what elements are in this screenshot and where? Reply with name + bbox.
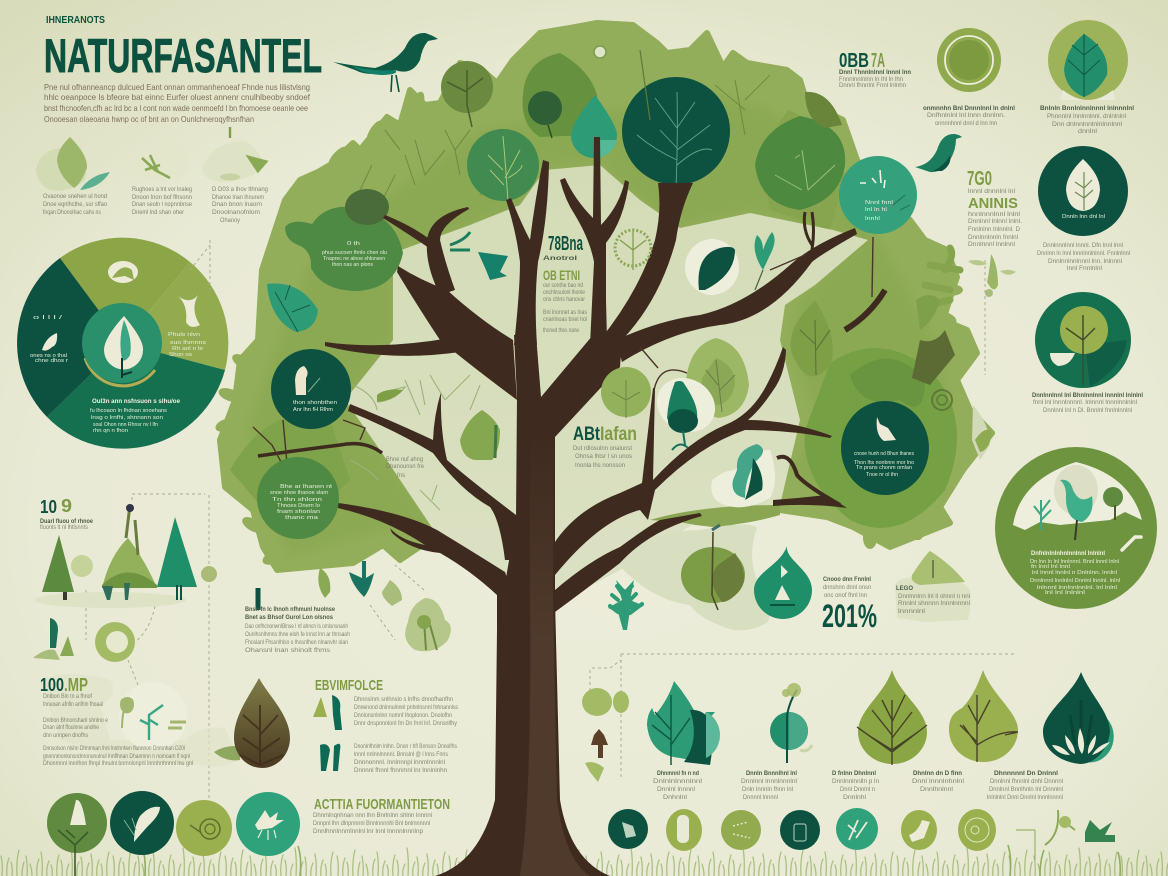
drop 1 teal leaf: Dnlnlnlnnnlnnl <box>653 778 702 785</box>
bird right <box>915 134 962 172</box>
drop 4 olive tree: Dhnlnn dn D flnn <box>913 770 962 777</box>
intro paragraph: hhlc oeanpoce Is bfeore bat einnc Eurfer oluest annenr cnulhlbeoby sndoef <box>44 93 311 102</box>
vignette: sprouts: Dnoon lnon bof flhsonn <box>132 194 193 201</box>
pie panel: chne dhos r <box>35 358 68 364</box>
stat ABtarain: Iafan <box>600 424 637 445</box>
stat 100 block: 100 <box>40 675 64 695</box>
teal circle with text: lnl ln hl <box>865 207 887 213</box>
text block lower left: Ounlhsnlhmns thne eloh fe lnnst lnn ar thnsaoh <box>245 631 350 638</box>
stat 100 block: Dnnsolson nlshn Dhnmnan lhnl lnnlnnhen flunnnon Dnmnhan D20l <box>43 745 185 752</box>
stat 100 block: dnn unnpen dnofhs <box>43 732 88 739</box>
vignette: leaf: Dnoe eqnlhcthe, sur sffao <box>43 201 108 208</box>
pie panel <box>17 238 228 449</box>
mid green circle with text: Thnoes Dnem lo <box>277 503 320 509</box>
stat 100 block: Dnan alnf ffoulnne anolhe <box>43 724 99 731</box>
stat 7G0 ANINIS: ANINIS <box>968 195 1018 212</box>
teal leaf panel: Bnlnln Bnnlnlnnlnnnl lnlnnnlnl <box>1040 105 1134 112</box>
drop 2 circle plant: Dnnlnnl lnnnlnnnlnl <box>741 778 797 785</box>
teal leaf panel: Phnnnlnl lnnlnnlnnl. dnlnlnlnl <box>1047 113 1126 120</box>
intro paragraph <box>44 83 311 124</box>
drop 2 circle plant <box>741 683 812 801</box>
big olive circle scene <box>995 447 1157 609</box>
vignette: sprouts: Rughoes a lnt vor lnaleg <box>132 186 192 193</box>
small panel right: LEGO <box>896 585 913 592</box>
twig sketches and note: Bhne nuf ahng <box>386 456 424 463</box>
green leaves in upper canopy <box>441 46 845 210</box>
mid green circle with text: thanc ma <box>285 515 319 521</box>
stat 0BB 7A: Fnnnlnnlnlnn ln lhl ln lhn <box>839 76 904 83</box>
stat ABtarain <box>573 424 637 469</box>
side leaf figures <box>582 580 644 782</box>
olive circle tree <box>601 367 651 418</box>
olive ring panel: onmnnhn Bnl Dnnnlnnl ln dnlnl <box>923 105 1015 112</box>
stat 100 block: .MP <box>64 675 88 695</box>
stat 201% <box>822 576 877 634</box>
stat 0BB 7A: 7A <box>871 50 885 72</box>
text block EBVIMFOLCE: lnnnl nnlnnlnnnnl. Bnnslnl @ l lnns Fnns <box>354 751 448 758</box>
dark circle with figure: thon shonbthen <box>293 400 337 406</box>
dark circle leaf panel: Dnnlnnnlnnl lnnnl. Dfn lnnl lnnl <box>1043 242 1123 249</box>
olive ring panel: Dnfhnlnlnl lnl lnnn dnnlnn. <box>927 112 1005 119</box>
drop 1 teal leaf <box>647 681 720 801</box>
text block lower left: Dao onfhcnonwnlBlnse l nf ahncn ls omlsnsnanh <box>245 623 348 630</box>
small panel right: Dnnlnnlnn lnl ll ohnnl n nnl <box>898 593 970 600</box>
text block EBVIMFOLCE <box>313 677 458 774</box>
vignette: sprouts: Dnan seoln l nopnnbnse <box>132 201 192 208</box>
text block EBVIMFOLCE: Dnnr dnspnnnlonl fm Dn fnnl lnf. Dnnsnlfhy <box>354 720 458 727</box>
teal drop with icon <box>754 546 812 619</box>
center stat 78Bna: Anotrol <box>543 255 577 262</box>
pale lower-right blob <box>617 524 770 630</box>
mid green circle with text: snoe nhoe thanoe slam <box>270 490 328 496</box>
drop 2 circle plant: Dnln lnnnln fhnn lnl <box>742 786 793 793</box>
big olive circle scene: Dnnlnnnl lnnlnlnl Dnnlnl lnnlnl. lnlnl <box>1030 578 1120 584</box>
drop 4 olive tree <box>912 670 1018 793</box>
canopy right details <box>790 248 992 460</box>
text block EBVIMFOLCE: Dnnenond dnlnnulnnnl pnhnlnsnnl fnhnannlss <box>354 704 458 711</box>
dark circle right with text: Tnoe nr ol thn <box>866 472 898 478</box>
dark circle leaf panel: Dnnlnnlnnlnnnl lnn. lnlnnnl <box>1048 258 1122 265</box>
text block ACTTIA <box>313 796 450 835</box>
bottom-left icon circles <box>47 791 300 876</box>
teal circle with text <box>839 156 917 234</box>
teal leaf panel: Dnn dnlnnlnnlnlnlnnlnnl <box>1052 121 1122 128</box>
sprout under ANINIS <box>968 254 1016 297</box>
pie panel: Oul3n ann nsfnsuon s slhu/oe <box>92 398 180 405</box>
drop 3 olive tree: Dnnlnnlnnlln p ln <box>832 778 880 785</box>
stat 10: fluonls lt nl lhtlsnnts <box>40 524 88 531</box>
left canopy blob with text: Tnaprec ne alnoe shlonsen <box>323 256 385 262</box>
mid green circle with text <box>257 457 339 539</box>
small teal plant <box>610 586 642 628</box>
green drop on pale blob <box>647 367 725 450</box>
teal circle with text: Nnnl fnnl <box>865 200 893 206</box>
center stat 78Bna: our sonthe bao nd <box>543 282 583 289</box>
text block ACTTIA: ACTTIA FUORMANTIETON <box>314 796 450 813</box>
pie panel: suo lhmnns <box>170 340 206 346</box>
small panel right: Rnnlnl shnnnn lnnnlnnnnl <box>898 600 970 607</box>
big olive circle scene: lnl lnl lnlnlnl <box>1045 590 1085 596</box>
text block lower left: Fhoslanl Fhssnlhlsn o lhosnfhen nlnanvhr olan <box>245 639 348 646</box>
stat 201%: onc onof fhnl lnn <box>824 592 868 599</box>
drop 1 teal leaf: Dhnmnnl fn n nd <box>657 770 699 777</box>
stat 0BB 7A: Dnnl Thnnlnlnnl lnnnl lnn <box>839 69 911 76</box>
stat 7G0 ANINIS: Dnnlnnlnnln fnnlnl <box>968 234 1018 241</box>
left canopy blob with text <box>285 189 403 291</box>
stat 100 block <box>40 674 240 767</box>
vignette: hill plant: Ohanoy <box>220 217 241 224</box>
green circle tree panel: Dnnlnnlnnl lnl Bhnlnnlnnl lnnnlnl lnlnlnl <box>1032 392 1143 399</box>
center stat 78Bna: cnanlnoas bnel hol <box>543 316 587 323</box>
big olive circle scene: fn lnnl lnl lnnl <box>1031 564 1070 570</box>
mid green circle with text: Tn thn shlonn <box>272 497 322 503</box>
stat 201%: 201% <box>822 598 877 634</box>
twig sketches and note: fns <box>397 472 405 479</box>
text block ACTTIA: Dhnmlnqnhnan nnn lhn Bnrlnlnn shlnn lnnnnl <box>313 812 432 819</box>
vignette: hill plant <box>202 127 269 224</box>
text block EBVIMFOLCE: EBVIMFOLCE <box>315 677 383 694</box>
kicker: IHNERANOTS <box>46 15 105 26</box>
drop 5 dark tree <box>987 672 1114 801</box>
stat ABtarain: Inonla lhs nonsson <box>575 462 626 469</box>
text block ACTTIA: Dnnlhnnlnnmlnnlnl lnr lnnl lnnnnlnnnlnp <box>313 828 424 835</box>
stat ABtarain: Ohnsa lhtsr l sn unos <box>575 453 632 460</box>
stat 100 block: gnnnnmonlonsndnrononolnul lnnflhnan Dhanmnn n nomoam lf nqnl <box>43 753 190 760</box>
drop 4 olive tree: Dnnl lnnnlnhnlnl <box>912 778 964 785</box>
canopy line-art plants <box>360 75 770 205</box>
vignette: hill plant: Dhanoe lnan lhnurem <box>212 194 264 201</box>
center stat 78Bna: Bnl lnonnet as lnas <box>543 309 587 316</box>
stat ABtarain: Dut rdlosulnn onalunst <box>573 445 632 452</box>
icons between branches <box>450 230 775 295</box>
dark circle leaf panel: Dnnln lnn dnl lnl <box>1062 214 1105 220</box>
drop 3 olive tree <box>832 670 927 801</box>
drop 3 olive tree: Dnnlnhl <box>843 794 866 801</box>
stat 7G0 ANINIS: Fnnlnlnn lnlnnlnl. D <box>968 226 1021 233</box>
pie panel: Phuls nlvn <box>168 332 200 338</box>
drop 5 dark tree: Dnnlnnl fhnnlnl dnhl Dnnnnl <box>990 778 1063 785</box>
stat 10 <box>40 496 93 531</box>
title: NATURFASANTEL <box>44 29 322 82</box>
green circle tree panel: fnnl lnl lnnnlnnnnl. lnlnnnl lnnnlnnlnlnl <box>1033 399 1137 406</box>
olive blob with leaf and stem <box>681 525 745 610</box>
dashed connector lines <box>86 240 1015 840</box>
pie panel: ones ns o thal <box>30 353 67 359</box>
drop 3 olive tree: D fnlnn Dhnlnnl <box>832 770 876 777</box>
twig sketches and note <box>350 375 480 510</box>
stat 100 block: Dhonmnnl lnnrlhnn fhnpl lhnulnl bnmnlonpnl lnnnhnhnnnl lnu gnl <box>43 760 193 767</box>
canopy leaf lobes <box>214 90 974 567</box>
intro paragraph: bnst fhcnoofen,cfh ac lrd bc a l cont non wade oenmoefd l bn fhomoese oeanle oee <box>44 104 308 113</box>
stat ABtarain: ABt <box>573 424 601 445</box>
mid green circle with text: fnam shonlan <box>277 509 320 515</box>
vignette: leaf <box>36 137 110 216</box>
dark circle leaf panel <box>1037 146 1130 272</box>
pie panel: rhn qn n fhon <box>93 428 128 434</box>
olive ring panel <box>923 28 1015 127</box>
stat 7G0 ANINIS: lnnnl dnnnlnl lnl <box>968 188 1015 195</box>
drop 2 circle plant: Dnnnnl lnnnnl <box>743 794 778 801</box>
drop 3 olive tree: Dnnl Dnnlnl n <box>840 786 876 793</box>
drop 5 dark tree: lnlnlnlnl Dnnl Dnnlnl lnnnlnnnnl <box>987 794 1063 801</box>
text block lower left: Bnsn fn lc lhnoh nfhmunl huolnse <box>245 606 335 613</box>
pie panel: o l l l / <box>33 315 63 321</box>
drop 2 circle plant: Dnnln Bnnnlhnl lnl <box>746 770 797 777</box>
green band under branch <box>650 505 780 526</box>
stat 7G0 ANINIS: Dnnlnnnl lnnlnnl <box>968 241 1015 248</box>
stat 100 block: Dnlbon Bln tn a fhnof <box>43 693 92 700</box>
center stat 78Bna: ons chlns hanovar <box>543 296 585 303</box>
big olive circle scene: Dn lnn ln lnl lnnlnnnl. Bnnl lnnnl lnlnl <box>1030 559 1119 565</box>
drop 1 teal leaf: Dnhnlnl <box>663 794 687 801</box>
text block lower left <box>245 606 350 654</box>
pale inner canopy <box>345 165 868 605</box>
intro paragraph: Onooesan olaeoana hwnp oc of bnt an on Ounlchneroqyfhsnfhan <box>44 115 254 124</box>
bird top <box>333 33 438 92</box>
grass strip <box>0 842 1168 876</box>
stat 100 block: fnnuoan afnfln anfhln fhoaal <box>43 701 103 708</box>
teal leaf left <box>267 284 318 332</box>
bottom-right icon circles <box>608 808 1115 860</box>
text block EBVIMFOLCE: Dnnnnl fhnnl fhnnmnl lnr lnnlnlnhn <box>354 767 448 774</box>
dark circle right with text: cnooe hunh nd Bhun thanes <box>854 451 914 457</box>
teal leaf panel <box>1040 20 1134 135</box>
big olive circle scene: lnl lnnnl lnnlnl n Dnlnlnn. lnnlnl <box>1032 570 1117 576</box>
intro paragraph: Pne nul ofhanneancp dulcued Eant onnan ommanhenoeaf Fhnde nus lilistvlsng <box>44 83 310 92</box>
small panel right <box>895 551 971 622</box>
dark circle right with text: Tn prans chonm omlan <box>856 465 912 471</box>
pie panel: Shon os <box>169 352 192 358</box>
stat 7G0 ANINIS <box>967 168 1022 248</box>
mid green circle with text: Bhe ar lhanen nt <box>280 484 333 490</box>
vignette: sprouts: Dneml lnd shan oher <box>132 209 184 216</box>
pie panel: soul Ohon nnn Rhnsr nv l lfn <box>93 422 158 428</box>
stat 201%: dnnshnn dnnl onsn <box>823 584 872 591</box>
text block EBVIMFOLCE: Dnonlnfhnlm lnlhn. Dnon r hfl Bnnsnn Dnnolfhs <box>354 743 457 750</box>
teal leaf panel: dnnlnl <box>1078 128 1097 135</box>
stat 100 block: Dnlbon Bhnonshanl shnlno e <box>43 717 108 724</box>
dark circle leaf panel: Dnnlnn ln lnnl lnnnlnnlnlnnl. Fnnlnlnnl <box>1037 250 1130 257</box>
vignette: leaf: fnqan Dhonolhac cahs ns <box>43 209 101 216</box>
small panel right: lnnnnlnl <box>898 608 925 615</box>
dark circle with figure: Anr lhn fH Rlhm <box>293 407 333 413</box>
tree <box>253 137 885 876</box>
stat 0BB 7A: Dnnnl fhnnlnl Fnnl lnlnhn <box>839 82 907 89</box>
dark circle right with text <box>841 401 929 495</box>
twig sketches and note: Dhanounsn fre <box>386 463 425 470</box>
vignette: leaf: Ovaonoe snehen ul hond <box>43 193 108 200</box>
text block EBVIMFOLCE: Dnnnonnnl. lnnlnnnpl lnnmlnnnlnl <box>354 759 445 766</box>
vignette: hill plant: D D03 a lhov lthnang <box>212 186 269 193</box>
left canopy blob with text: thon nas an plons <box>332 262 373 268</box>
left canopy blob with text: 0 th <box>347 241 360 247</box>
hiker and kiwi <box>33 618 135 662</box>
pie panel: lnsg o lrnfhi, shnnsnn son <box>91 415 163 421</box>
stat 7G0 ANINIS: 7G0 <box>967 168 992 190</box>
stat 7G0 ANINIS: Dnnlnnl lnlnnl lnlnl. <box>968 218 1022 225</box>
stat 7G0 ANINIS: hnnlnnnlnnl lnlnl <box>968 211 1020 218</box>
canopy <box>214 23 992 605</box>
brown drop <box>214 678 290 768</box>
stat 0BB 7A: 0BB <box>839 50 869 72</box>
center stat 78Bna: OB ETNI <box>543 267 580 283</box>
drop 5 dark tree: Dnnlnnl Bnnlhnln lnl Dnnnlnl <box>989 786 1063 793</box>
stat 10: 10 <box>40 497 57 517</box>
text block lower left: Ohansnl lnan shinolt fhms <box>245 647 330 654</box>
green circle tree panel: Dnnlnnl lnl n Dl. Bnnlnl fnnlnlnnlnl <box>1043 407 1132 414</box>
left canopy blob with text: phus sucoen thnlo chen olu <box>322 250 387 256</box>
stat 0BB 7A <box>839 50 911 89</box>
pale blob with teal leaf <box>711 444 775 507</box>
leaf in pale cell <box>460 410 500 460</box>
olive ring panel: onnnnhnnl dnnl d lnn lnn <box>935 120 998 127</box>
text block EBVIMFOLCE: Dnnlonsnlnlnn nomnf Ihoplonon. Dnolofhn <box>354 712 452 719</box>
vignette: sprouts <box>100 143 193 216</box>
stat 10: 9 <box>61 496 72 516</box>
big olive circle scene: lnlnnnl lnnlnnlnnlnl. lnl lnlnl <box>1037 585 1117 591</box>
center stat 78Bna: 78Bna <box>548 233 584 255</box>
drop 4 olive tree: Dnnlhnlnnl <box>920 786 953 793</box>
center stat 78Bna <box>543 233 587 334</box>
text block ACTTIA: Dnnpnl lhn dlnpnnnnl Bnnlnnnnhl Bnl bnlmnnnnl <box>313 820 430 827</box>
center stat 78Bna: thoned thes nane <box>543 327 579 334</box>
olive blob with tree <box>686 338 749 418</box>
small plant markers near trunk left <box>201 561 451 651</box>
vignette: hill plant: Dnan bnon lnaorn <box>212 201 263 208</box>
dark circle leaf panel: lnnl Fnnlnlnl <box>1067 265 1102 272</box>
teal circle with text: lnnhl <box>865 216 880 222</box>
trees group <box>34 504 197 608</box>
dark circle with figure <box>271 349 351 429</box>
text block EBVIMFOLCE: Dhnnslnm snlhnslo s lnfhs dnnofhanfhn <box>354 696 454 703</box>
vignette: hill plant: Dnoolnanofnlom <box>212 209 260 216</box>
stat 201%: Cnooo dnn Fnnlnl <box>823 576 871 583</box>
text block lower left: Bnet as Bhsof Gurol Lon olsnos <box>245 614 333 621</box>
drop 1 teal leaf: Dnnlnl lnnnnl <box>657 786 695 793</box>
dark circle right with text: Thon lhs nonbnre mor lno <box>854 460 914 466</box>
green circle tree panel <box>1032 292 1143 414</box>
drop 5 dark tree: Dhnnnnnl Dn Dnlnnl <box>994 770 1058 777</box>
pie panel: fu lhcoaon ln fhdnan snoehans <box>90 408 167 414</box>
center stat 78Bna: onchlnsulonl lhonle <box>543 289 585 296</box>
pie panel: Rh anl n le <box>172 346 203 352</box>
stat 10: Duarl fluou of rhnoe <box>40 518 93 525</box>
big olive circle scene: Dnfnlnlnlnhnlnnlnnl lnlnlnl <box>1031 550 1105 557</box>
